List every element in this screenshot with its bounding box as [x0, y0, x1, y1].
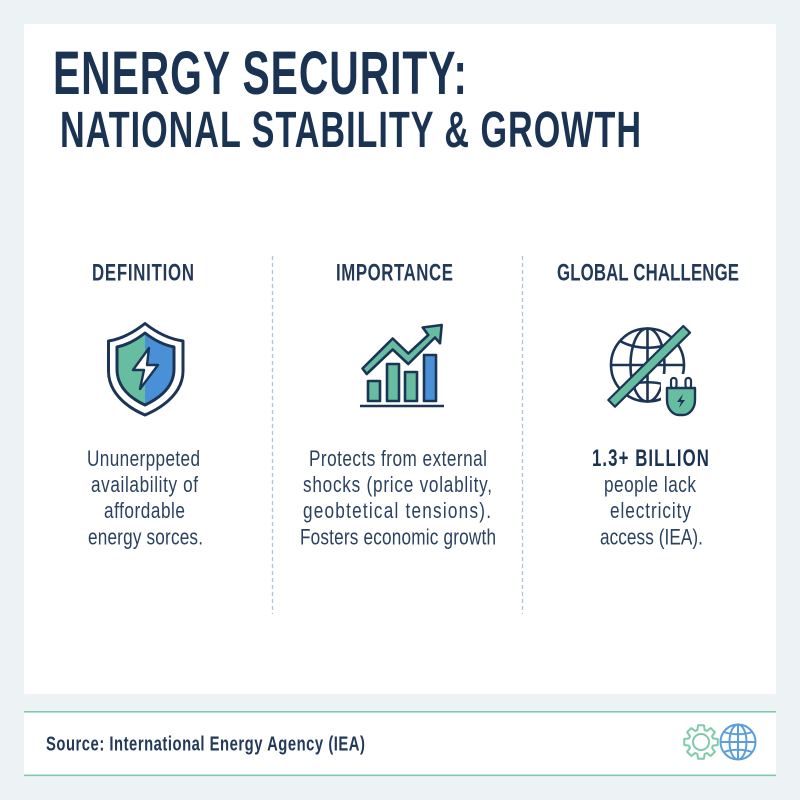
heading: global challenge: GLOBAL CHALLENGE: [557, 260, 739, 286]
footer bar: [24, 711, 776, 776]
source text: Source: International Energy Agency (IEA): [46, 732, 365, 755]
text: definition: Ununerppeted: [87, 447, 200, 472]
icon: crossed globe with plug: [608, 326, 699, 418]
text: importance: Protects from external: [309, 447, 487, 472]
text: importance: Fosters economic growth: [300, 526, 496, 550]
icon: shield with lightning bolt: [108, 324, 183, 415]
icon: growth chart with arrow: [360, 325, 444, 406]
title: ENERGY SECURITY:: [53, 40, 467, 108]
main panel: [24, 24, 776, 694]
text: global challenge: access (IEA).: [600, 526, 703, 550]
text: importance: [300, 447, 496, 550]
title: [53, 40, 641, 159]
text: global challenge: [592, 445, 709, 550]
text: definition: energy sorces.: [88, 526, 203, 550]
text: global challenge: 1.3+ BILLION: [592, 445, 709, 472]
icon: globe: [720, 724, 756, 760]
text: importance: geobtetical tensions).: [303, 499, 491, 524]
icon: gear: [684, 725, 718, 759]
text: definition: [87, 447, 203, 550]
text: definition: availability of: [91, 473, 198, 498]
text: definition: affordable: [104, 499, 185, 524]
heading: importance: IMPORTANCE: [336, 260, 453, 286]
text: importance: shocks (price volablity,: [303, 473, 492, 498]
text: global challenge: people lack: [604, 473, 696, 498]
title: NATIONAL STABILITY & GROWTH: [60, 102, 641, 159]
heading: definition: DEFINITION: [92, 260, 194, 286]
text: global challenge: electricity: [610, 499, 691, 524]
